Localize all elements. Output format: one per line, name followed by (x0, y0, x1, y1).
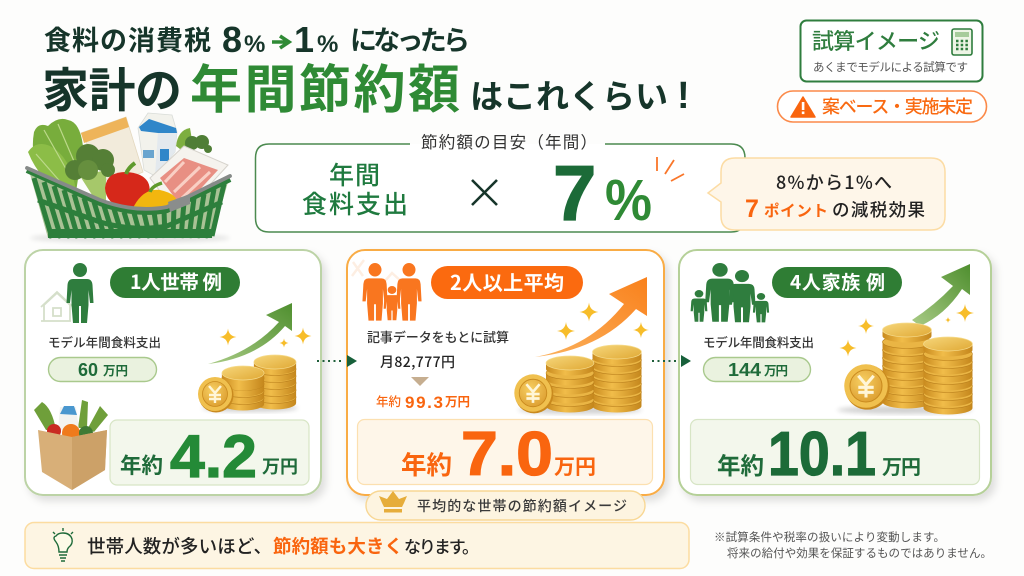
small broccoli (176, 128, 212, 153)
title line 1: になったら (350, 19, 470, 58)
badge: trial calculation: 試算イメージ (812, 24, 940, 56)
model spending value: 60 (78, 360, 98, 380)
formula heading: 節約額の目安（年間） (421, 129, 597, 153)
7 percent (553, 149, 652, 237)
annual food spending (302, 156, 408, 221)
title line 1: 食料の消費税 (44, 19, 211, 58)
panel: formula (256, 129, 745, 237)
takeaway text: 節約額も大きく (273, 533, 403, 559)
annual spending: 99.3 (405, 393, 443, 412)
icon: sparkles (840, 304, 974, 356)
arrow: growth (912, 264, 970, 326)
household label: 1人世帯 例 (130, 266, 222, 295)
icon: crown (379, 491, 407, 512)
red pepper (105, 163, 150, 208)
model spending value: 万円 (103, 360, 128, 379)
arrow: growth (208, 303, 292, 364)
badge: proposal based, not implemented: 案ベース・実施未定 (822, 93, 973, 119)
icon: coins (837, 323, 973, 414)
decorative house (352, 260, 402, 282)
callout: 7 point tax cut: の減税効果 (832, 197, 925, 222)
basket rim (27, 170, 230, 212)
7 percent: % (605, 168, 652, 233)
badge: trial calculation (800, 20, 982, 82)
annual saving (110, 420, 309, 490)
annual spending: 年約 (376, 391, 401, 410)
household label (431, 266, 583, 299)
arrow: connector 2 (652, 355, 691, 367)
title line 2: 年間節約額 (190, 48, 460, 123)
household label (110, 266, 240, 298)
icon: warning (791, 97, 815, 117)
household label: 2人以上平均 (450, 267, 564, 296)
annual saving: 年約 (401, 445, 452, 482)
household label (772, 267, 902, 298)
milk carton (138, 113, 177, 176)
title line 1: % (317, 31, 338, 58)
title line 2: ! (677, 75, 690, 117)
model spending value (704, 358, 810, 382)
panel: 2+ person average (347, 250, 664, 495)
panel: single household (25, 250, 321, 495)
title line 2 (42, 48, 690, 123)
icon: calculator (952, 29, 972, 55)
callout: 7 point tax cut: 8%から1%へ (776, 169, 892, 195)
takeaway text: なります。 (404, 533, 479, 558)
multiply sign (472, 180, 497, 205)
monthly value: 月82,777円 (380, 352, 455, 372)
title line 2: 家計の (42, 52, 182, 121)
icon: coins (198, 355, 298, 412)
annual food spending: 食料支出 (302, 185, 408, 221)
icon: sparkles (557, 302, 649, 340)
title line 1: 1 (294, 19, 314, 60)
accent lines (657, 157, 684, 181)
takeaway text: 世帯人数が多いほど、 (87, 533, 272, 559)
basket body (30, 174, 228, 238)
icon: family (691, 263, 769, 322)
callout: 7 point tax cut: 7 (745, 195, 759, 223)
panel: family of four (679, 250, 991, 495)
model spending label: モデル年間食料支出 (48, 332, 161, 351)
model spending value: 万円 (764, 360, 788, 379)
title line 1 (44, 19, 470, 60)
footnote: ※試算条件や税率の扱いにより変動します。 (714, 529, 945, 545)
annual spending (376, 391, 470, 412)
annual saving (690, 420, 980, 489)
arrow: connector 1 (317, 355, 357, 367)
meat tray (150, 146, 228, 212)
model spending label: モデル年間食料支出 (703, 332, 814, 351)
icon: light bulb (53, 528, 73, 561)
rice bag (81, 117, 143, 186)
callout: 7 point tax cut: ポイント (764, 199, 828, 221)
annual saving: 4.2 (170, 423, 257, 490)
callout: 7 point tax cut (708, 158, 945, 230)
average household ribbon: 平均的な世帯の節約額イメージ (417, 496, 627, 516)
takeaway text (87, 533, 479, 559)
annual saving: 10.1 (768, 420, 876, 489)
icon: coins (514, 345, 642, 414)
annual saving: 7.0 (461, 420, 553, 489)
annual saving: 年約 (717, 447, 764, 481)
average household ribbon (366, 491, 645, 520)
icon: person (66, 263, 94, 323)
annual saving (358, 420, 652, 489)
annual saving: 万円 (262, 453, 298, 479)
annual food spending: 年間 (329, 156, 380, 192)
icon: down triangle (411, 377, 429, 386)
icon: house (41, 292, 72, 321)
footnote: 将来の給付や効果を保証するものではありません。 (727, 545, 992, 561)
lettuce (28, 119, 83, 196)
panel: takeaway (25, 522, 689, 568)
title line 1: % (244, 31, 265, 58)
yellow pepper (132, 183, 177, 214)
icon: sparkles (220, 328, 312, 348)
footnote (714, 529, 992, 561)
model spending value: 144 (728, 360, 761, 380)
arrow: growth (535, 277, 647, 357)
title line 2: はこれくらい (470, 70, 668, 118)
icon: grocery bag (34, 400, 108, 490)
annual spending: 万円 (445, 391, 470, 410)
annual saving: 万円 (882, 451, 921, 480)
annual saving: 万円 (554, 451, 596, 481)
icon: family (362, 263, 422, 321)
broccoli (65, 144, 115, 200)
badge: proposal based, not implemented (778, 91, 986, 122)
model spending value (48, 358, 156, 382)
7 percent: 7 (553, 149, 596, 237)
household label: 4人家族 例 (790, 268, 885, 295)
source note: 記事データをもとに試算 (367, 327, 509, 346)
annual saving: 年約 (120, 449, 163, 480)
title line 1: 8 (222, 19, 242, 60)
badge: trial calculation: あくまでモデルによる試算です (813, 59, 968, 75)
icon: grocery basket (27, 113, 230, 243)
